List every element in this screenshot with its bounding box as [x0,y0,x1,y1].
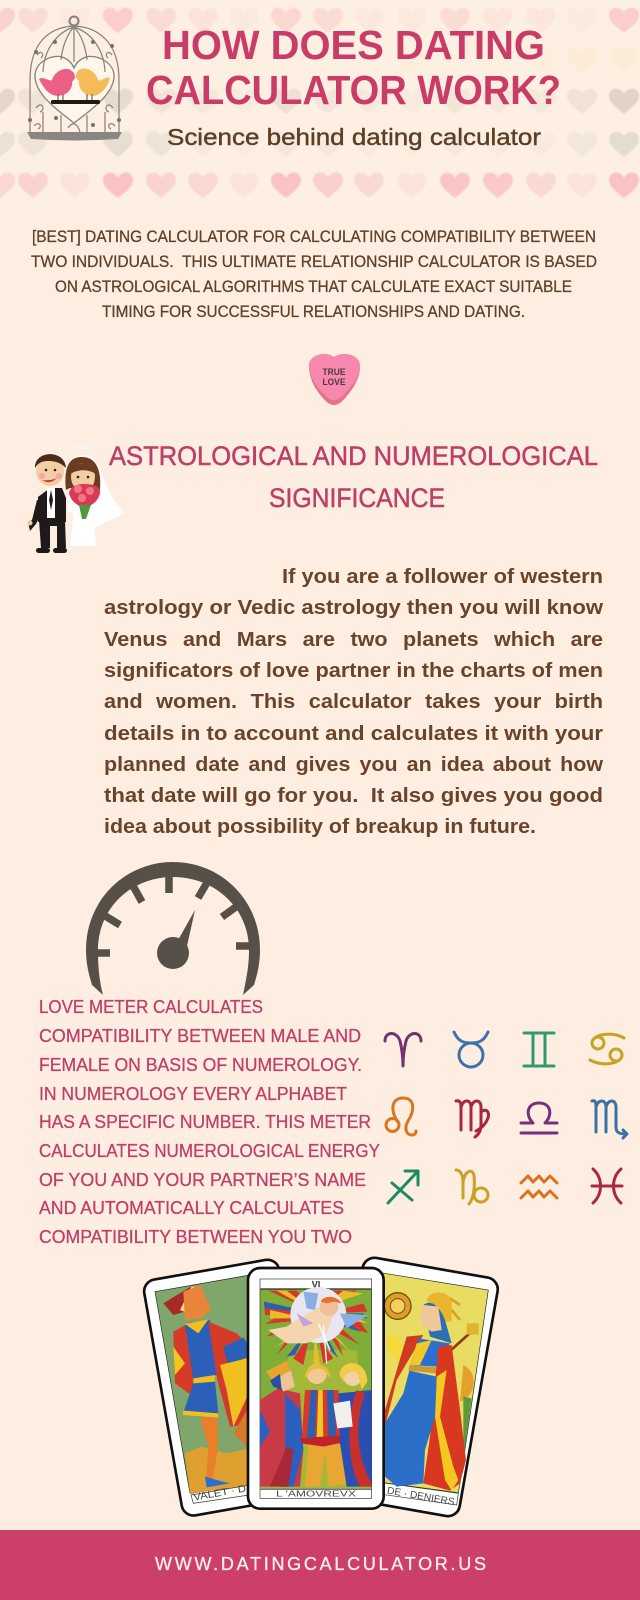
icon: bird cage with two love birds [27,16,122,140]
center card: l'amoureux: VI [312,1279,320,1289]
intro text block: [BEST] DATING CALCULATOR FOR CALCULATING COMPATIBILITY BETWEEN [32,227,596,246]
love meter text: CALCULATES NUMEROLOGICAL ENERGY [39,1140,380,1161]
center card: l'amoureux [248,1268,384,1509]
left card: valet de deniers: VALET · D [193,1484,247,1504]
love meter text: IN NUMEROLOGY EVERY ALPHABET [39,1083,347,1104]
love meter text: FEMALE ON BASIS OF NUMEROLOGY. [39,1054,362,1075]
title: HOW DOES DATING [162,22,545,68]
icon: true love candy heart: TRUE [322,367,346,377]
section heading: SIGNIFICANCE [269,483,445,513]
love meter text [39,996,380,1247]
body paragraph: Venus and Mars are two planets which are [104,628,603,651]
intro text block: TIMING FOR SUCCESSFUL RELATIONSHIPS AND DATING. [102,302,525,321]
icon: true love candy heart [309,354,360,405]
love meter text: OF YOU AND YOUR PARTNER’S NAME [39,1169,366,1190]
footer band: WWW.DATINGCALCULATOR.US [155,1554,486,1574]
body paragraph: that date will go for you. It also gives you good [104,784,603,807]
body paragraph: astrology or Vedic astrology then you will know [104,596,603,619]
icon: true love candy heart: LOVE [322,377,346,387]
center card: l'amoureux: L 'AMOVREVX [276,1489,356,1499]
body paragraph: If you are a follower of western [282,565,603,588]
libra [521,1103,557,1133]
aries [385,1034,421,1066]
section heading [109,441,598,513]
love meter text: AND AUTOMATICALLY CALCULATES [39,1197,344,1218]
taurus [454,1032,488,1067]
icon: bride and groom [28,444,125,553]
left card: valet de deniers [142,1258,319,1517]
zodiac symbols grid [385,1032,627,1204]
right card: reine de deniers: DE · DENIERS [386,1485,456,1508]
gemini [524,1033,554,1066]
body paragraph: details in to account and calculates it with your [104,722,603,745]
love meter text: COMPATIBILITY BETWEEN MALE AND [39,1025,361,1046]
body paragraph [104,565,603,838]
title: CALCULATOR WORK? [146,67,561,113]
scorpio [592,1101,627,1138]
body paragraph: and women. This calculator takes your birth [104,690,603,713]
subtitle: Science behind dating calculator [167,124,541,150]
pisces [592,1169,622,1203]
intro text block: TWO INDIVIDUALS. THIS ULTIMATE RELATIONSHIP CALCULATOR IS BASED [31,252,597,271]
icon: speedometer love meter [86,862,260,995]
body paragraph: significators of love partner in the charts of men [104,659,603,682]
love meter text: LOVE METER CALCULATES [39,996,263,1017]
intro text block: ON ASTROLOGICAL ALGORITHMS THAT CALCULATE EXACT SUITABLE [55,277,572,296]
cancer [590,1034,624,1064]
header background: rows of hearts [0,0,640,205]
body paragraph: planned date and gives you an idea about how [104,753,603,776]
section heading: ASTROLOGICAL AND NUMEROLOGICAL [109,441,598,471]
body paragraph: idea about possibility of breakup in future. [104,815,536,838]
aquarius [521,1176,557,1198]
love meter text: COMPATIBILITY BETWEEN YOU TWO [39,1226,352,1247]
sagittarius [388,1171,418,1203]
love meter text: HAS A SPECIFIC NUMBER. THIS METER [39,1111,371,1132]
capricorn [456,1170,488,1204]
tarot cards illustration [142,1256,500,1518]
right card: reine de deniers [323,1256,500,1518]
leo [386,1098,416,1135]
title [146,22,561,113]
virgo [456,1101,489,1137]
footer band [0,1530,640,1600]
intro text block [31,227,597,321]
